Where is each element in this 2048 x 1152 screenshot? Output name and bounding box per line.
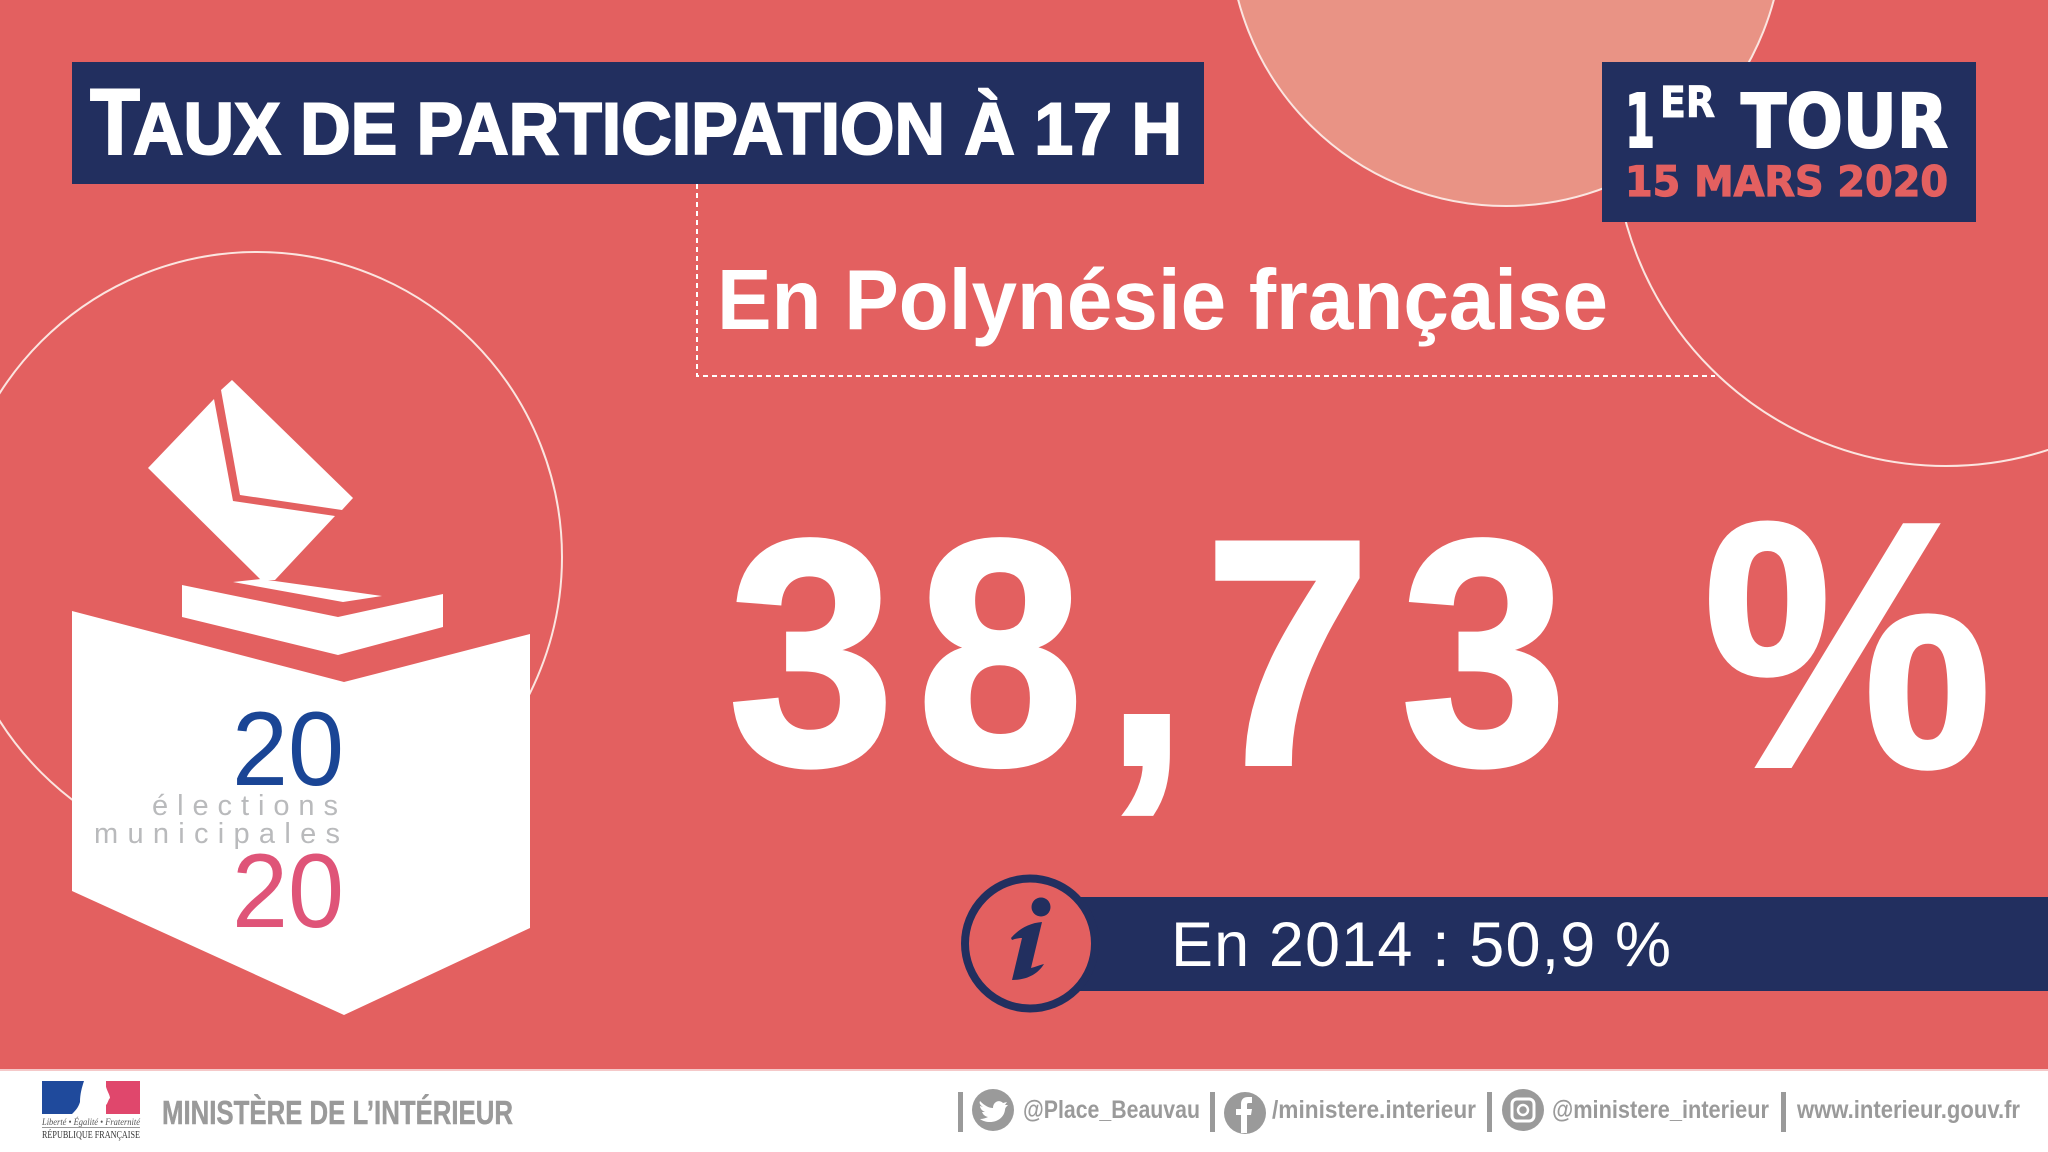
- elections logo: municipales: [94, 818, 340, 850]
- instagram handle: @ministere_interieur: [1552, 1096, 1769, 1124]
- social links: [958, 1089, 2020, 1134]
- main percentage: %: [1703, 449, 1992, 841]
- logo: Marianne: [41, 1081, 141, 1141]
- main percentage: ,: [1105, 473, 1188, 832]
- title banner: [72, 62, 1204, 184]
- round and date badge: 15 MARS 2020: [1625, 157, 1948, 206]
- icon: envelope: [148, 380, 353, 580]
- elections logo: 20: [232, 833, 344, 950]
- icon: information: [965, 878, 1095, 1008]
- elections logo: 20: [232, 691, 344, 808]
- icon: facebook: [1224, 1092, 1266, 1134]
- main percentage: 3: [1401, 473, 1567, 832]
- round and date badge: 1: [1625, 79, 1655, 165]
- icon: box lid: [182, 585, 443, 655]
- main percentage: 3: [728, 473, 895, 832]
- previous result banner: En 2014 : 50,9 %: [1171, 910, 1671, 980]
- icon: box body: [72, 611, 530, 1015]
- twitter handle: @Place_Beauvau: [1023, 1096, 1200, 1124]
- website: www.interieur.gouv.fr: [1796, 1096, 2020, 1124]
- dashed location frame: [697, 184, 1715, 376]
- logo: Marianne: Liberté • Égalité • Fraternité: [41, 1117, 141, 1127]
- icon: instagram: [1502, 1089, 1544, 1131]
- icon: ballot slot: [233, 579, 382, 602]
- logo: Marianne: RÉPUBLIQUE FRANÇAISE: [42, 1129, 140, 1141]
- location heading: En Polynésie française: [717, 253, 1608, 348]
- icon: twitter: [972, 1089, 1014, 1131]
- ballot box logo: [72, 380, 530, 1015]
- round and date badge: [1602, 62, 1976, 222]
- title banner: AUX DE PARTICIPATION À 17 H: [133, 89, 1182, 170]
- ministry name: MINISTÈRE DE L’INTÉRIEUR: [162, 1094, 513, 1131]
- main percentage: 8: [917, 473, 1084, 832]
- round and date badge: TOUR: [1741, 79, 1948, 165]
- footer band: [0, 1069, 2048, 1152]
- main percentage: 7: [1204, 473, 1371, 832]
- title banner: T: [90, 69, 140, 174]
- elections logo: [94, 691, 344, 950]
- elections logo: élections: [152, 790, 338, 822]
- round and date badge: ER: [1660, 78, 1715, 128]
- previous result banner: [965, 878, 2048, 1008]
- facebook handle: /ministere.interieur: [1272, 1096, 1476, 1124]
